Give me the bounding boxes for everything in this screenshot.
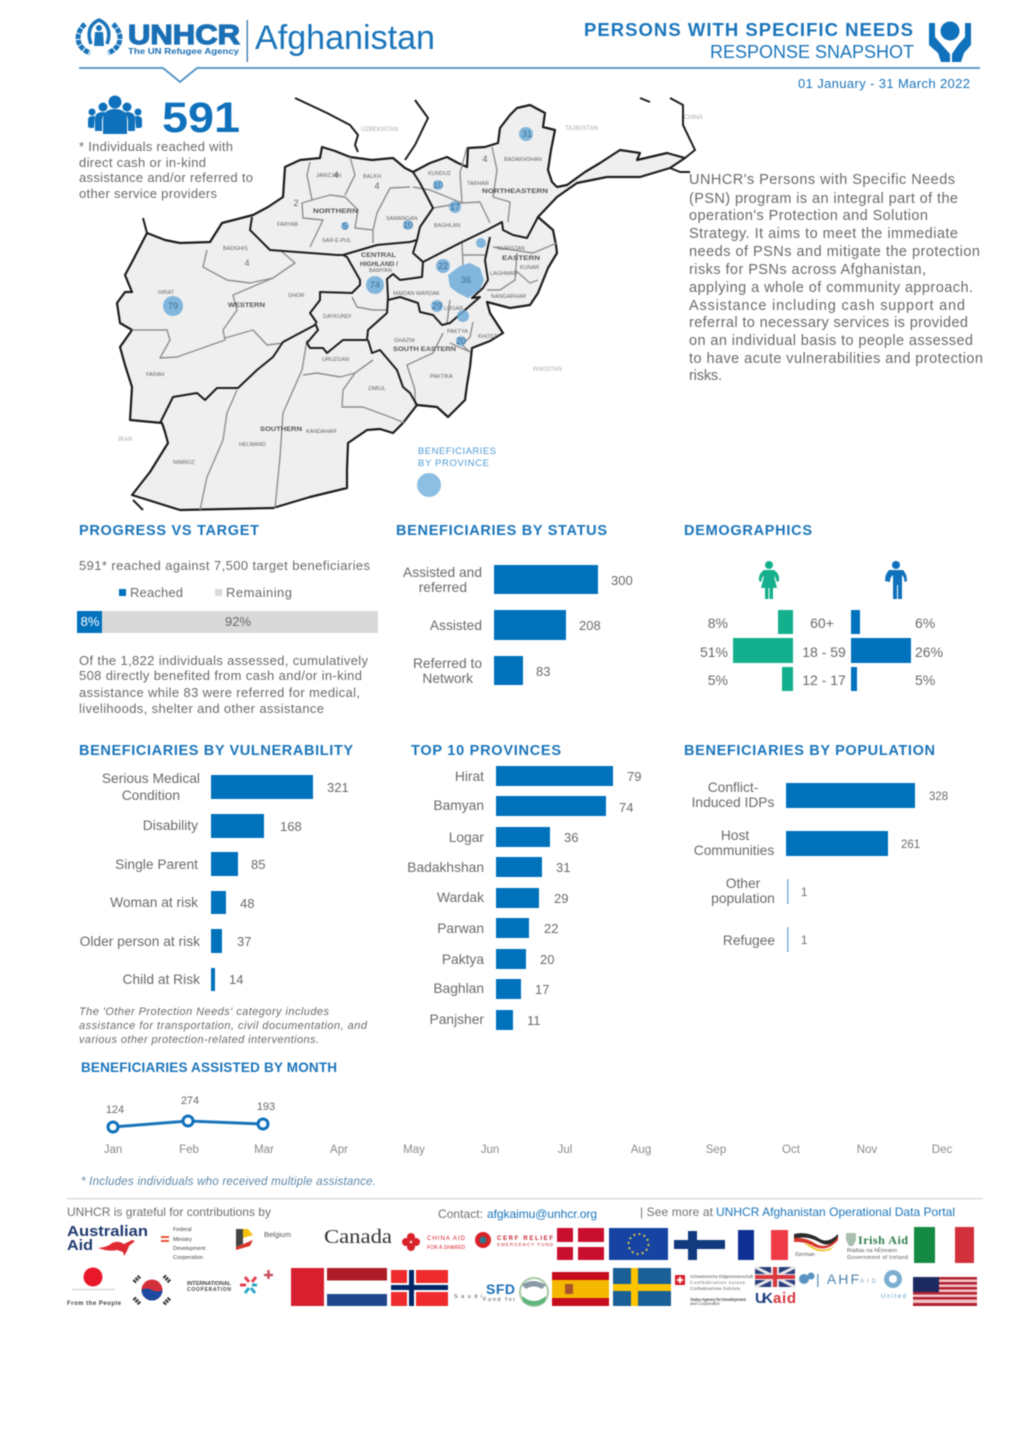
logo: Irish Aid — [846, 1233, 908, 1261]
line chart: Oct — [782, 1144, 801, 1156]
bar chart: 261 — [901, 839, 920, 851]
text block: programme description: to have acute vulnerabilities and protection — [689, 351, 983, 367]
bubble values: 10 — [403, 220, 413, 230]
bar chart: population — [711, 891, 775, 906]
bar chart: Disability — [143, 818, 198, 833]
data portal link: UNHCR Afghanistan Operational Data Portal — [716, 1205, 955, 1219]
pyramid chart: 8% — [708, 615, 728, 631]
region and province labels: FARAH — [146, 372, 164, 378]
line chart: 274 — [181, 1095, 199, 1107]
region and province labels: KUNAR — [520, 265, 539, 271]
bar chart: Referred to — [413, 656, 482, 671]
logo: Canada: Canada — [324, 1226, 392, 1248]
bubble values: 36 — [461, 275, 471, 285]
progress summary: 591* reached against 7,500 target beneficiaries — [79, 558, 370, 573]
region and province labels: SOUTH EASTERN — [393, 346, 456, 353]
contact: Contact: — [438, 1207, 483, 1221]
bar chart: 83 — [536, 664, 550, 679]
vulnerability note: The 'Other Protection Needs' category includes — [79, 1006, 330, 1018]
heading: DEMOGRAPHICS — [684, 523, 812, 539]
region and province labels: HELMAND — [239, 442, 266, 448]
bar chart: 11 — [527, 1013, 540, 1028]
logo: Saudi Fund for Development: SFD — [486, 1281, 515, 1297]
region and province labels: BALKH — [363, 174, 381, 180]
bar chart: Host — [721, 828, 749, 843]
region and province labels: NORTHERN — [313, 208, 358, 215]
text block: programme description: applying a whole of community approach. — [689, 280, 973, 296]
bar chart: Communities — [694, 843, 774, 858]
flag: Denmark — [557, 1228, 604, 1260]
logo: Irish Aid: Rialtas na hÉireann — [847, 1247, 897, 1254]
bar chart: 208 — [579, 618, 601, 633]
region and province labels: CENTRAL — [361, 252, 396, 259]
divider — [246, 20, 248, 62]
logo: China aid — [402, 1233, 466, 1251]
logo: UK aid — [755, 1267, 796, 1307]
logo: UNHCR wordmark: The UN Refugee Agency — [128, 46, 239, 56]
logo: UNHCR wordmark: UNHCR — [128, 19, 240, 50]
map legend: BY PROVINCE — [418, 458, 489, 469]
progress note: livelihoods, shelter and other assistance — [79, 701, 324, 716]
logo: CERF: CERF RELIEF — [497, 1236, 553, 1242]
bar chart: 36 — [564, 830, 578, 845]
line chart: 193 — [257, 1101, 275, 1113]
region and province labels: GHOR — [288, 293, 305, 299]
logo: Australian Aid — [67, 1224, 148, 1256]
text block: programme description: Assistance including cash support and — [689, 298, 965, 314]
logo: Belgium: Belgium — [264, 1230, 291, 1239]
bubble values: 74 — [370, 280, 380, 290]
bubble values: 79 — [168, 301, 178, 311]
region and province labels: KHOST — [478, 334, 498, 340]
logo: Australian Aid: Aid — [67, 1238, 93, 1254]
region and province labels: BAGHLAN — [434, 223, 460, 229]
header rule with chevron — [79, 68, 980, 82]
heading: PROGRESS VS TARGET — [79, 523, 259, 539]
text block: programme description: Strategy. It aims to meet the immediate — [689, 226, 958, 242]
legend: Remaining — [226, 585, 292, 600]
key figure caption: * Individuals reached with — [79, 139, 233, 154]
panel: beneficiaries by vulnerability — [79, 743, 368, 1046]
text block: programme description: (PSN) program is an integral part of the — [689, 191, 958, 207]
line chart: May — [403, 1144, 425, 1156]
pyramid chart: 26% — [915, 644, 943, 660]
logo: Switzerland: Confederazione Svizzera — [690, 1286, 740, 1291]
logo: development ministry: Federal — [173, 1227, 192, 1233]
bubble values — [168, 129, 532, 346]
logo: China aid: FOR A SHARED — [427, 1245, 465, 1251]
key figure caption: assistance and/or referred to — [79, 170, 253, 185]
logo: UN agency: United — [881, 1294, 906, 1300]
bar chart: Wardak — [437, 890, 484, 905]
logo: development ministry: Development — [173, 1246, 206, 1252]
bubble values: 2 — [293, 198, 299, 208]
region and province labels: URUZGAN — [322, 357, 349, 363]
bar chart: 300 — [611, 573, 633, 588]
bar chart: Baghlan — [433, 981, 484, 996]
bar chart: 20 — [540, 952, 554, 967]
pyramid chart — [700, 610, 943, 691]
bar chart: Bamyan — [433, 798, 484, 813]
logo: Saudi Fund for Development: Fund for — [483, 1297, 515, 1303]
bubble values: 4 — [482, 154, 488, 164]
bar chart: 85 — [251, 857, 265, 872]
pyramid chart: 18 - 59 — [802, 644, 846, 660]
text block: programme description: needs of PSNs and mitigate the protection — [689, 244, 980, 260]
line chart: Aug — [631, 1144, 651, 1156]
logo: Switzerland: Swiss Agency for Development — [690, 1297, 746, 1302]
progress note: Of the 1,822 individuals assessed, cumulatively — [79, 653, 368, 668]
panel: beneficiaries assisted by month — [81, 1060, 952, 1156]
bubble values: 10 — [433, 180, 443, 190]
number: 591 — [162, 94, 240, 142]
logo: UNHCR emblem — [78, 20, 120, 53]
vulnerability note: various other protection-related interventions. — [79, 1034, 319, 1046]
flag: European Union — [609, 1228, 668, 1260]
panel: demographics — [684, 523, 943, 691]
pyramid chart: 12 - 17 — [802, 672, 846, 688]
region and province labels: EASTERN — [502, 255, 540, 262]
bar chart — [403, 565, 633, 686]
bubble values: 22 — [438, 261, 448, 271]
bar chart: Hirat — [455, 769, 484, 784]
title: country: Afghanistan — [255, 19, 435, 57]
bar chart — [407, 766, 641, 1030]
logo: Irish Aid: Irish Aid — [858, 1233, 908, 1247]
logo: Japan: From the People — [67, 1301, 122, 1307]
bar chart: 29 — [554, 891, 568, 906]
bar chart: 74 — [619, 800, 633, 815]
bar chart: 14 — [229, 972, 243, 987]
logo: Germany — [794, 1233, 838, 1258]
flag: France — [738, 1230, 788, 1260]
region and province labels: SOUTHERN — [260, 426, 302, 433]
logo: UK aid: UK — [755, 1290, 773, 1307]
flag: South Korea — [134, 1276, 170, 1304]
line chart: Nov — [857, 1144, 877, 1156]
line chart: Jan — [104, 1144, 122, 1156]
bar chart: 321 — [327, 780, 349, 795]
logo: Switzerland: and Cooperation — [690, 1301, 720, 1306]
line chart: Jun — [481, 1144, 499, 1156]
region and province labels: FARYAB — [277, 222, 299, 228]
donor logos — [67, 1224, 977, 1307]
icon: group of people — [88, 96, 142, 134]
footer — [67, 1198, 983, 1221]
bar chart: Single Parent — [115, 857, 198, 872]
heading: BENEFICIARIES ASSISTED BY MONTH — [81, 1060, 337, 1075]
logo: Belgium — [236, 1229, 291, 1250]
key figure caption — [79, 139, 253, 201]
logo: development ministry: Cooperation — [173, 1255, 203, 1261]
bar chart — [692, 780, 948, 952]
region and province labels: BADGHIS — [223, 246, 248, 252]
panel: progress vs target — [77, 523, 378, 716]
bar chart: referred — [419, 580, 467, 595]
region and province labels: CHINA — [684, 115, 703, 121]
bubble values: 17 — [450, 202, 460, 212]
legend — [119, 585, 292, 600]
region and province labels: GHAZNI — [394, 338, 415, 344]
icon: person in protective hands — [929, 22, 971, 62]
logo: AHF: | AHF — [816, 1271, 859, 1287]
bubble values: 20 — [456, 336, 466, 346]
heading: BENEFICIARIES BY VULNERABILITY — [79, 743, 353, 759]
flag: Spain — [552, 1272, 609, 1306]
region and province labels: PAKTIKA — [430, 374, 453, 380]
logo: Irish Aid: Government of Ireland — [847, 1255, 908, 1261]
bar chart: Refugee — [723, 933, 775, 948]
flag: Austria — [291, 1268, 324, 1306]
bar chart: 31 — [556, 860, 570, 875]
bar chart: Paktya — [442, 952, 484, 967]
beneficiary bubbles — [163, 127, 533, 346]
logo: AHF: AID — [860, 1279, 877, 1285]
region and province labels: IRAN — [118, 437, 132, 443]
region and province labels: NIMROZ — [173, 460, 195, 466]
title: report name — [584, 19, 914, 62]
bar chart: Other — [726, 876, 761, 891]
logo: UK aid: aid — [773, 1290, 796, 1307]
progress bar: 8% — [81, 614, 100, 629]
bar chart: 22 — [544, 921, 558, 936]
map of Afghanistan — [117, 98, 703, 510]
bar chart: Badakhshan — [407, 860, 484, 875]
region and province labels: NURISTAN — [497, 246, 525, 252]
bubble values: 4 — [374, 181, 380, 191]
logo: Liechtenstein and Luxembourg: COOPERATION — [187, 1287, 231, 1293]
text block: programme description — [689, 172, 983, 384]
logo: Liechtenstein and Luxembourg: INTERNATIONAL — [187, 1281, 232, 1287]
region and province labels: HIRAT — [158, 290, 175, 296]
progress bar: 92% — [225, 614, 251, 629]
region and province labels: KANDAHAR — [306, 429, 337, 435]
bar chart: 1 — [801, 935, 807, 947]
pyramid chart: 5% — [708, 672, 728, 688]
bar chart: 79 — [627, 769, 641, 784]
province boundaries — [132, 147, 557, 510]
line chart: Jul — [558, 1144, 572, 1156]
map legend — [417, 446, 496, 497]
bubble values: 4 — [333, 170, 339, 180]
pyramid chart: 5% — [915, 672, 935, 688]
flag: Italy — [914, 1227, 974, 1263]
bar chart: Serious Medical — [102, 771, 200, 786]
text block: programme description: on an individual basis to people assessed — [689, 333, 973, 349]
text block: programme description: risks. — [689, 368, 722, 384]
logo: CERF: EMERGENCY FUND — [497, 1242, 554, 1247]
flag: Finland — [674, 1231, 725, 1260]
map legend: BENEFICIARIES — [418, 446, 496, 457]
contact — [438, 1207, 597, 1221]
country outline — [117, 105, 685, 510]
bar chart: Child at Risk — [123, 972, 200, 987]
line chart: Sep — [706, 1144, 726, 1156]
logo: UN agency — [881, 1270, 906, 1300]
key figure — [79, 94, 253, 201]
heading: BENEFICIARIES BY STATUS — [396, 523, 607, 539]
pyramid chart: 6% — [915, 615, 935, 631]
bar chart: Induced IDPs — [692, 795, 775, 810]
logo: development ministry — [161, 1227, 206, 1261]
key figure caption: direct cash or in-kind — [79, 155, 206, 170]
logo: Germany: German — [795, 1252, 815, 1258]
flag: Norway — [391, 1270, 448, 1306]
region and province labels: JAWZJAN — [316, 173, 341, 179]
region and province labels: NORTHEASTERN — [482, 188, 548, 195]
line chart: Feb — [179, 1144, 199, 1156]
bubble values: 4 — [244, 258, 250, 268]
line chart: 124 — [106, 1104, 124, 1116]
logo: Switzerland: Confédération suisse — [690, 1280, 745, 1285]
progress bar — [77, 611, 378, 633]
logo: Switzerland — [675, 1274, 754, 1306]
key figure caption: other service providers — [79, 186, 218, 201]
bar chart: 48 — [240, 896, 254, 911]
bar chart: 328 — [929, 791, 948, 803]
data portal link: | See more at — [640, 1205, 714, 1219]
title: report name: RESPONSE SNAPSHOT — [710, 42, 914, 62]
region and province labels: TAJIKISTAN — [565, 126, 598, 132]
bar chart: Panjsher — [430, 1012, 484, 1027]
region and province labels: KUNDUZ — [428, 171, 452, 177]
logo: Australian Aid: Australian — [67, 1224, 148, 1240]
bar chart: Parwan — [437, 921, 484, 936]
bar chart: 17 — [535, 982, 549, 997]
flag: United States — [913, 1277, 977, 1306]
progress note: assistance while 83 were referred for medical, — [79, 685, 360, 700]
logo: Saudi Fund for Development — [454, 1278, 548, 1306]
text block: programme description: risks for PSNs across Afghanistan, — [689, 262, 926, 278]
region and province labels: LAGHMAN — [490, 271, 517, 277]
logo: Japan — [67, 1268, 122, 1307]
progress note: 508 directly benefited from cash and/or in-kind — [79, 668, 362, 683]
contributions line: UNHCR is grateful for contributions by — [67, 1205, 271, 1219]
panel: top 10 provinces — [407, 743, 641, 1030]
logo: CERF — [475, 1232, 554, 1248]
logo: China aid: CHINA AID — [427, 1236, 466, 1242]
text block: programme description: operation's Protection and Solution — [689, 208, 928, 224]
contact: afgkaimu@unhcr.org — [487, 1207, 597, 1221]
region and province labels: HIGHLAND / — [360, 261, 398, 268]
bar chart: Assisted — [430, 618, 482, 633]
flag: Sweden — [613, 1268, 671, 1306]
progress note — [79, 653, 368, 716]
title: report name: PERSONS WITH SPECIFIC NEEDS — [584, 19, 913, 40]
panel: beneficiaries by population — [684, 743, 948, 952]
text block: programme description: referral to necessary services is provided — [689, 315, 968, 331]
flag: Netherlands — [327, 1268, 387, 1306]
bar chart: Condition — [122, 788, 180, 803]
logo: AHF — [799, 1271, 877, 1287]
heading: BENEFICIARIES BY POPULATION — [684, 743, 935, 759]
date: 01 January - 31 March 2022 — [798, 76, 970, 91]
line chart: Mar — [254, 1144, 274, 1156]
bar chart: Older person at risk — [80, 934, 200, 949]
pyramid chart: 51% — [700, 644, 728, 660]
logo: Switzerland: Schweizerische Eidgenossenschaft — [690, 1274, 754, 1279]
bar chart: Logar — [449, 830, 484, 845]
heading: TOP 10 PROVINCES — [411, 743, 561, 759]
line chart: Apr — [330, 1144, 348, 1156]
region and province labels: MAIDAN WARDAK — [393, 291, 440, 297]
bar chart: Conflict- — [708, 780, 758, 795]
region and province labels: BAMYAN — [369, 268, 392, 274]
text block: programme description: UNHCR's Persons with Specific Needs — [689, 172, 955, 188]
region and province labels: WESTERN — [228, 302, 265, 309]
region and province labels: TAKHAR — [467, 181, 489, 187]
line chart: Dec — [932, 1144, 952, 1156]
header — [78, 19, 980, 91]
bubble values: 31 — [522, 129, 532, 139]
bar chart: 1 — [801, 887, 807, 899]
logo: Saudi Fund for Development: Saudi — [454, 1294, 482, 1300]
bubble values: 5 — [342, 221, 348, 231]
region and province labels: PAKISTAN — [533, 367, 562, 373]
region and province labels: SAR-E-PUL — [322, 238, 351, 244]
region and province labels: NANGARHAR — [491, 294, 526, 300]
logo: Liechtenstein and Luxembourg — [187, 1270, 273, 1293]
panel: beneficiaries by status — [396, 523, 633, 686]
vulnerability note — [79, 1006, 368, 1046]
region and province labels: SAMANGAN — [386, 216, 418, 222]
region and province labels: BADAKHSHAN — [504, 157, 542, 163]
bar chart: Woman at risk — [110, 895, 198, 910]
regional boundaries — [133, 98, 695, 510]
vulnerability note: assistance for transportation, civil documentation, and — [79, 1020, 368, 1032]
bar chart: Assisted and — [403, 565, 482, 580]
region and province labels — [118, 115, 703, 466]
bar chart: 168 — [280, 819, 302, 834]
line chart — [104, 1095, 952, 1156]
legend: Reached — [130, 585, 183, 600]
region and province labels: DAYKUNDI — [323, 314, 351, 320]
footnote: * Includes individuals who received multiple assistance. — [81, 1176, 376, 1188]
bubble values: 29 — [432, 301, 442, 311]
icon: male — [885, 561, 907, 599]
region and province labels: LOGAR — [444, 306, 463, 312]
bar chart: Network — [422, 671, 473, 686]
bar chart: 37 — [237, 934, 251, 949]
region and province labels: UZBEKISTAN — [361, 127, 398, 133]
region and province labels: ZABUL — [368, 386, 386, 392]
bar chart — [80, 771, 349, 991]
pyramid chart: 60+ — [810, 615, 834, 631]
icon: female — [759, 561, 779, 599]
logo: development ministry: Ministry — [173, 1237, 192, 1243]
region and province labels: PAKTYA — [447, 329, 468, 335]
